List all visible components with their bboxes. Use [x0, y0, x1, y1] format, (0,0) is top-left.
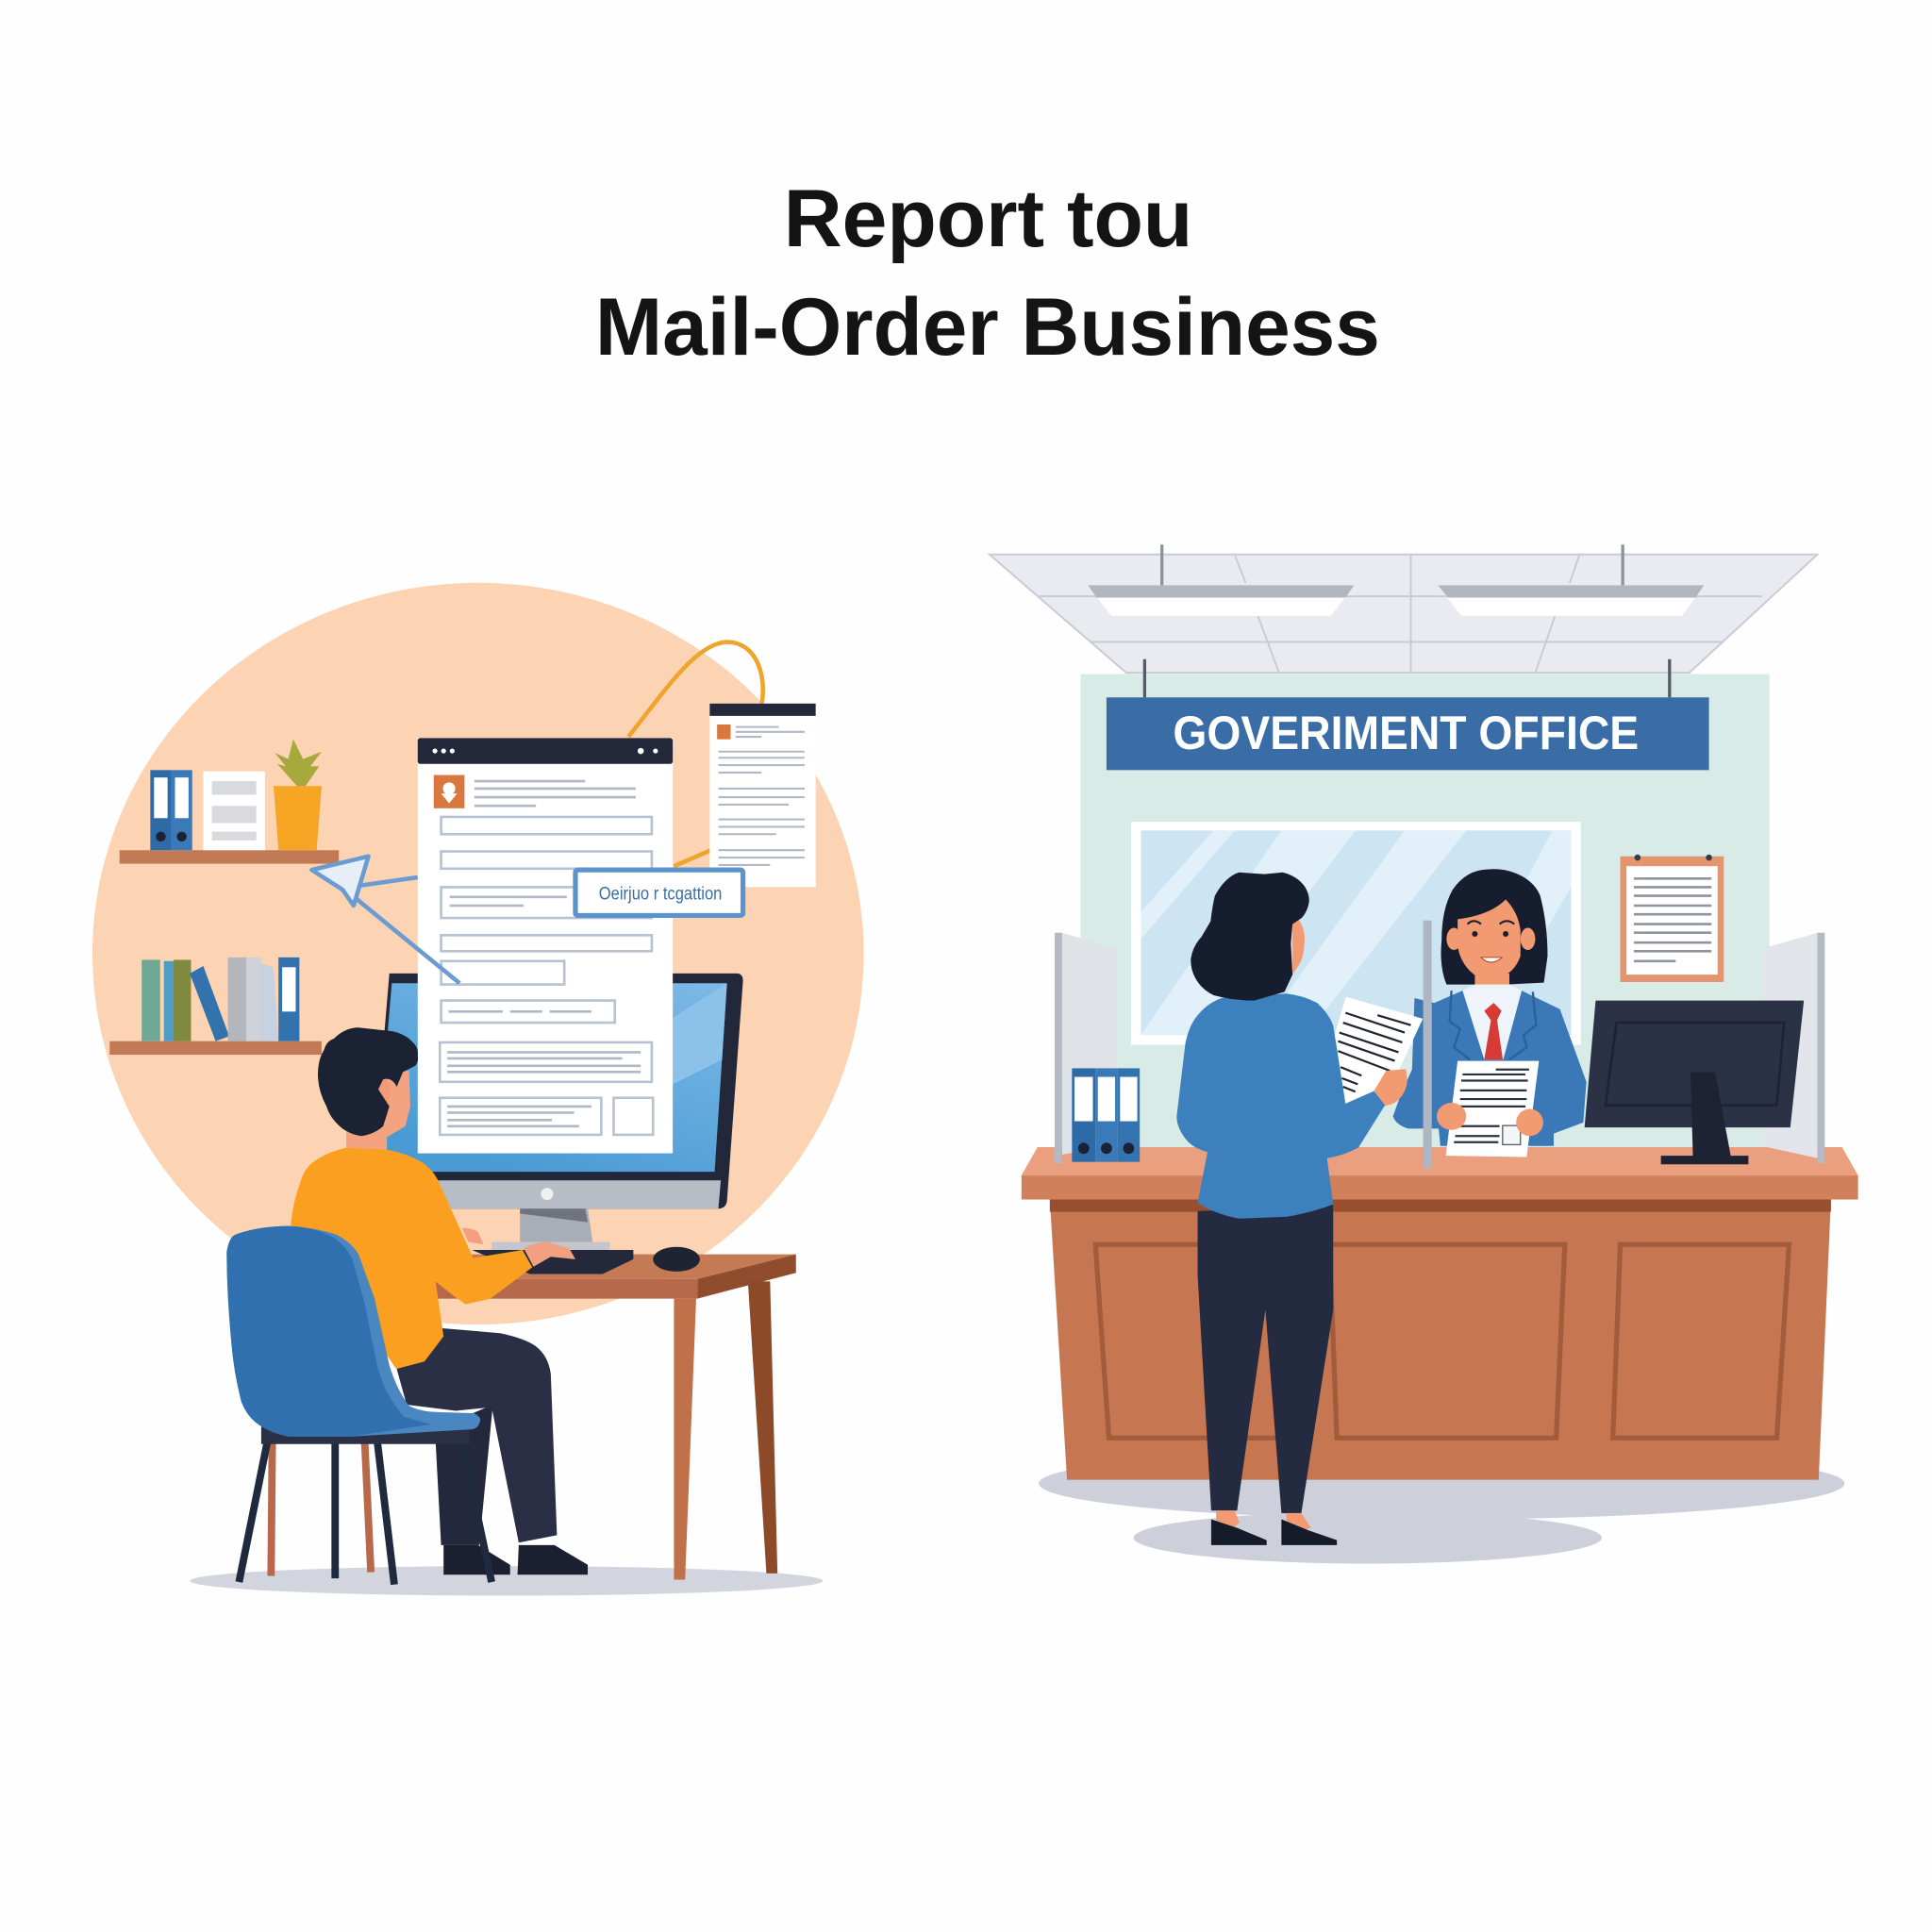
callout label: Oeirjuo r tcgattion: [599, 884, 722, 904]
person at computer: [226, 1027, 588, 1585]
sign hanger rods: [1144, 659, 1670, 697]
clerk shirt and tie: [1450, 985, 1536, 1059]
small document window: [709, 704, 816, 887]
icon: form avatar: [434, 775, 464, 808]
customer: [1176, 873, 1423, 1545]
title: [595, 174, 1380, 373]
floor shadows: [1039, 1448, 1844, 1563]
panel: government office scene: [990, 544, 1858, 1563]
counter panels: [1095, 1244, 1789, 1438]
sign: government office: [1107, 697, 1709, 770]
computer monitor: [1585, 1001, 1804, 1164]
upper shelf with items: [120, 740, 339, 864]
customer trousers: [1198, 1205, 1333, 1514]
shoes: [443, 1545, 588, 1574]
chair: [226, 1226, 491, 1585]
clerk: [1393, 869, 1587, 1146]
lower shelf with books: [109, 958, 322, 1055]
customer hand: [1374, 1069, 1407, 1107]
desk: [425, 1255, 796, 1579]
customer shoes: [1211, 1510, 1337, 1545]
centre glass post: [1424, 921, 1432, 1168]
customer face: [1292, 920, 1305, 974]
mouse: [653, 1247, 700, 1272]
hands: [462, 1228, 575, 1267]
arrow: paper plane pointer: [311, 857, 459, 983]
clerk face: [1446, 899, 1535, 991]
form text lines: [447, 781, 641, 1126]
form fields: [440, 817, 653, 1135]
counter: [1022, 1147, 1858, 1480]
customer paper: [1335, 997, 1423, 1104]
main web form document: [418, 738, 673, 1154]
orange connector curve: [628, 641, 763, 866]
panel: online reporting scene: [92, 583, 864, 1595]
neck and face: [346, 1071, 410, 1154]
sign: government office: GOVERIMENT OFFICE: [1173, 707, 1639, 759]
lower leg: [435, 1405, 492, 1545]
customer jacket: [1176, 993, 1385, 1219]
wall notice: [1621, 855, 1724, 982]
desktop monitor: [370, 974, 743, 1251]
floor shadow: [190, 1566, 823, 1595]
customer hair: [1191, 873, 1309, 1001]
keyboard: [472, 1250, 633, 1274]
peach background circle: [92, 583, 864, 1324]
hair: [318, 1027, 418, 1136]
ear: [375, 1079, 391, 1104]
sweater: [291, 1148, 532, 1369]
service window: [1131, 822, 1581, 1045]
title: Mail-Order Business: [595, 282, 1380, 373]
title: Report tou: [784, 174, 1192, 264]
back wall: [1080, 674, 1770, 1155]
blue binders: [1072, 1068, 1140, 1162]
ceiling lights: [1088, 544, 1704, 616]
clerk hair: [1441, 869, 1547, 985]
clerk jacket: [1393, 991, 1587, 1146]
side glass partitions: [1055, 933, 1824, 1163]
ceiling: [990, 544, 1818, 673]
callout label: [575, 870, 743, 915]
clerk paper and hands: [1437, 1061, 1543, 1157]
chair rear legs: [271, 1440, 371, 1576]
trousers: [397, 1328, 557, 1542]
